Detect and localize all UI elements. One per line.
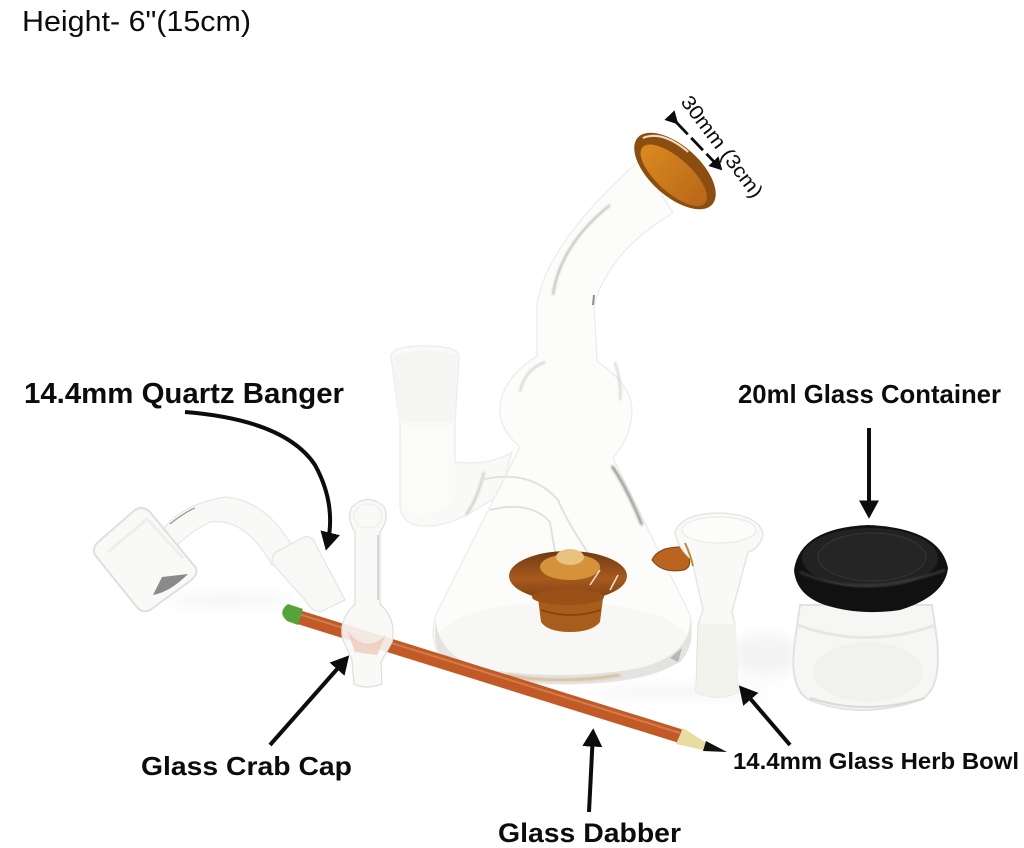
arrow: to crab cap bbox=[270, 659, 346, 745]
glass crab cap bbox=[342, 500, 393, 687]
label: 30mm dimension: 30mm (3cm) bbox=[676, 92, 767, 202]
glass dabber bbox=[282, 604, 727, 752]
arrow: to banger bbox=[185, 412, 330, 546]
label: quartz banger: 14.4mm Quartz Banger bbox=[24, 378, 344, 410]
soft floor shadows bbox=[165, 594, 800, 698]
arrow: to container bbox=[867, 428, 871, 514]
arrow: to dabber bbox=[589, 733, 593, 812]
label: dabber: Glass Dabber bbox=[498, 818, 682, 848]
pipe body bbox=[433, 160, 692, 684]
quartz banger bbox=[94, 497, 345, 612]
amber percolator bbox=[509, 549, 627, 632]
amber nub bbox=[652, 547, 690, 571]
arrow: to herb bowl bbox=[742, 689, 790, 745]
glass jar with black lid bbox=[793, 525, 948, 710]
glass herb bowl bbox=[675, 513, 763, 697]
title: height: Height- 6"(15cm) bbox=[22, 6, 251, 38]
label: glass container: 20ml Glass Container bbox=[738, 379, 1001, 409]
label: herb bowl: 14.4mm Glass Herb Bowl bbox=[733, 748, 1019, 774]
water pipe bbox=[391, 119, 729, 684]
pipe joint arm bbox=[391, 346, 512, 526]
amber mouthpiece lip bbox=[621, 119, 729, 223]
label: crab cap: Glass Crab Cap bbox=[141, 751, 352, 781]
arrow: lip width bbox=[676, 122, 720, 168]
